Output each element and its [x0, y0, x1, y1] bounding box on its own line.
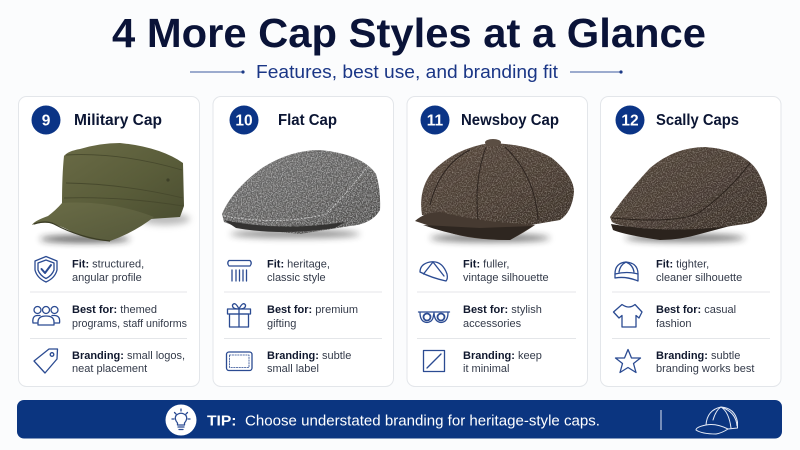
number badge 10 — [230, 106, 258, 134]
icon: people — [33, 306, 60, 325]
photo: olive military cap — [32, 143, 190, 242]
row: branding — [226, 350, 351, 370]
row: best for — [228, 304, 358, 327]
icon: gift — [228, 304, 250, 327]
icon: shield — [35, 256, 57, 282]
text: fit line 2: classic style — [267, 272, 326, 284]
heading: Military Cap: Military Cap — [74, 112, 162, 129]
number badge 12 — [616, 106, 644, 134]
text: best for: Best for: themed — [72, 304, 157, 316]
text: best for: Best for: stylish — [463, 304, 542, 316]
number badge 10: 10 — [235, 112, 253, 130]
icon: cap — [615, 262, 638, 281]
heading: Newsboy Cap: Newsboy Cap — [461, 112, 559, 129]
text: best for line 2: accessories — [463, 318, 522, 330]
photo: dark brown scally cap — [610, 147, 767, 242]
icon: baseball cap outline — [696, 407, 738, 434]
row: branding — [424, 350, 542, 372]
heading: Flat Cap: Flat Cap — [278, 112, 337, 129]
text: best for line 2: gifting — [267, 318, 296, 330]
row: branding — [616, 350, 740, 372]
tip label: TIP: — [207, 412, 236, 430]
number badge 9 — [32, 106, 60, 134]
photo: brown newsboy cap — [415, 139, 574, 242]
subtitle with rules — [190, 62, 623, 82]
text: fit: Fit: heritage, — [267, 258, 330, 270]
icon: sunglasses — [418, 312, 450, 322]
panel: Flat Cap — [213, 96, 394, 386]
text: branding line 2: branding works best — [656, 363, 754, 375]
tip banner — [17, 400, 782, 438]
row: fit — [35, 256, 144, 282]
text: best for line 2: fashion — [656, 318, 691, 330]
text: best for: Best for: premium — [267, 304, 358, 316]
icon: light bulb — [166, 404, 196, 436]
text: fit: Fit: structured, — [72, 258, 144, 270]
row: branding — [34, 349, 185, 373]
panel: Military Cap — [18, 96, 200, 386]
icon: column — [228, 260, 251, 281]
photo: grey herringbone flat cap — [222, 150, 380, 238]
row: best for — [418, 304, 542, 322]
row: fit — [228, 258, 330, 281]
text: branding line 2: neat placement — [72, 363, 147, 375]
text: branding: Branding: subtle — [267, 350, 351, 362]
text: branding: Branding: subtle — [656, 350, 740, 362]
text: fit line 2: vintage silhouette — [463, 272, 549, 284]
number badge 9: 9 — [42, 112, 51, 130]
heading: Scally Caps: Scally Caps — [656, 112, 739, 129]
row: best for — [614, 304, 736, 327]
number badge 12: 12 — [621, 112, 639, 130]
tip text: Choose understated branding for heritage-style caps. — [245, 412, 600, 430]
icon: minimal square — [424, 350, 444, 372]
panel: Scally Caps — [600, 96, 781, 386]
text: branding line 2: small label — [267, 363, 319, 375]
row: best for — [33, 304, 157, 325]
icon: stitched label — [226, 352, 252, 370]
panel: Newsboy Cap — [407, 96, 588, 386]
number badge 11: 11 — [427, 112, 444, 130]
row: fit — [615, 258, 709, 281]
icon: newsboy cap — [420, 262, 447, 281]
text: fit: Fit: tighter, — [656, 258, 709, 270]
number badge 11 — [420, 106, 450, 134]
text: branding: Branding: small logos, — [72, 350, 185, 362]
icon: star — [616, 350, 640, 372]
row: fit — [420, 258, 509, 281]
text: fit: Fit: fuller, — [463, 258, 509, 270]
icon: t-shirt — [614, 304, 642, 327]
text: best for: Best for: casual — [656, 304, 736, 316]
text: fit line 2: cleaner silhouette — [656, 272, 742, 284]
text: best for line 2: programs, staff uniforms — [72, 318, 187, 330]
title: 4 More Cap Styles at a Glance — [112, 10, 706, 56]
text: branding: Branding: keep — [463, 350, 542, 362]
subtitle with rules: Features, best use, and branding fit — [256, 62, 558, 82]
text: fit line 2: angular profile — [72, 272, 142, 284]
icon: tag — [34, 349, 58, 373]
text: branding line 2: it minimal — [463, 363, 509, 375]
